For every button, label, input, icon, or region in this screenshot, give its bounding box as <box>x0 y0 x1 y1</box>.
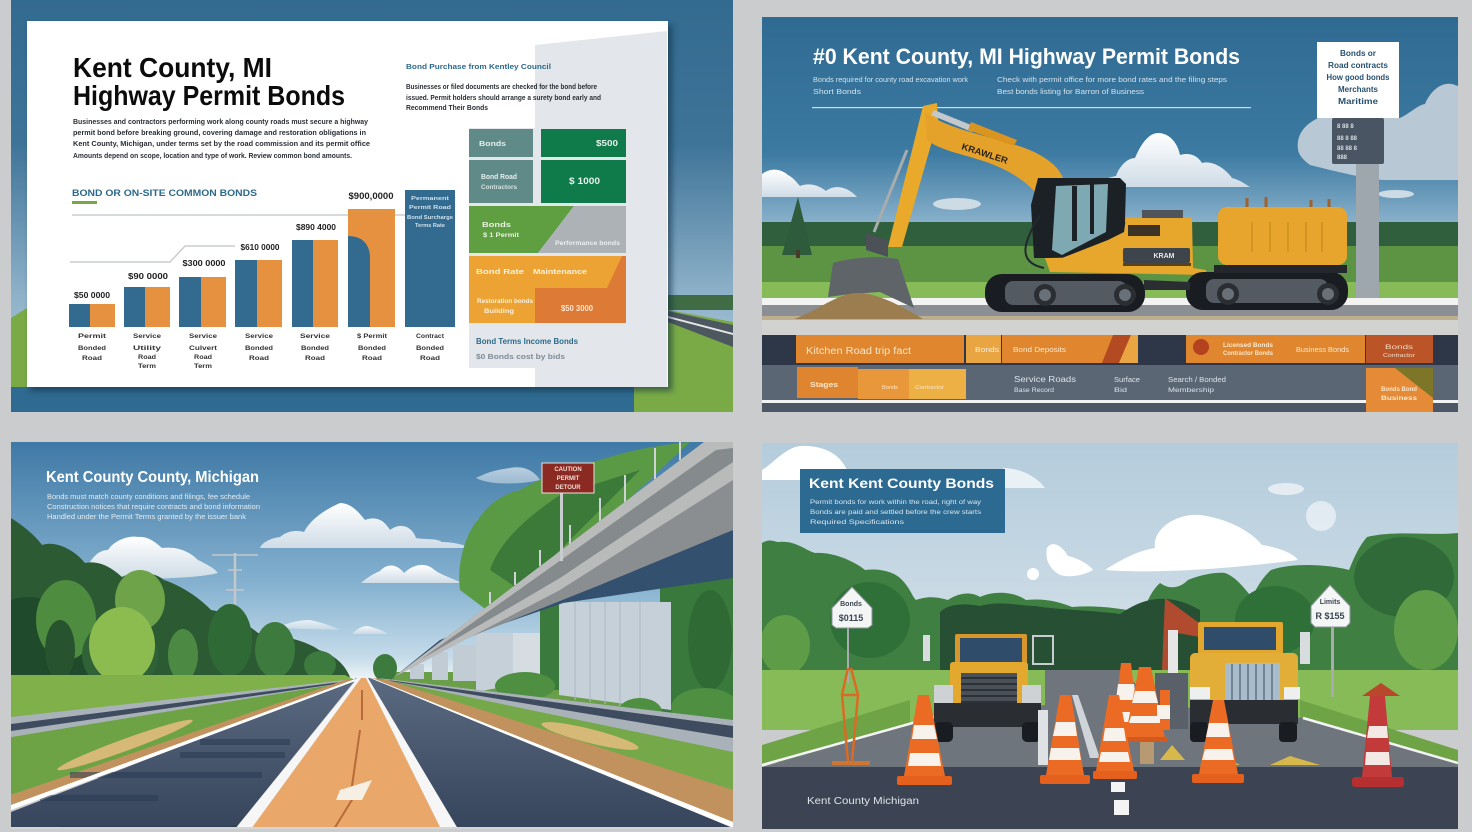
grass <box>762 670 1458 770</box>
bar 5 <box>292 222 338 327</box>
icon: pine tree <box>782 197 812 258</box>
bar category labels: Road <box>194 354 212 361</box>
bar category labels: Road <box>82 355 102 362</box>
sky <box>762 17 1458 227</box>
strip: bond badge bar: Contractor Bonds <box>1223 351 1274 357</box>
subtitle text: Best bonds listing for Barron of Business <box>997 87 1144 96</box>
side note heading and text: Businesses or filed documents are checked for the bond before <box>406 84 597 91</box>
dry grass patches <box>55 715 640 775</box>
strip: corner tile <box>1366 368 1433 412</box>
boom <box>932 120 1063 192</box>
white notice: Merchants <box>1338 85 1379 94</box>
intro text: Handled under the Permit Terms granted by the issuer bank <box>47 514 247 521</box>
tile: row 4: Building <box>484 308 514 315</box>
bushes at piers <box>495 672 739 728</box>
bar category labels: Bonded <box>416 345 444 352</box>
subtitle text <box>813 75 1227 96</box>
bar 2 <box>124 271 170 327</box>
strip: dark orange bar: Contractor <box>1383 353 1415 359</box>
road sign left <box>832 587 872 683</box>
bar category labels: Culvert <box>189 345 218 352</box>
road sign left: Bonds <box>840 601 862 608</box>
right truck <box>1155 598 1310 742</box>
strip: orange bar 3: Bond Deposits <box>1013 345 1066 354</box>
left lane <box>11 678 358 829</box>
strip: bond badge bar <box>1186 335 1365 363</box>
side note heading and text: Recommend Their Bonds <box>406 105 488 112</box>
bar category labels: $ Permit <box>357 333 388 340</box>
white report card <box>27 21 668 387</box>
side footer note: Bond Terms Income Bonds <box>476 337 579 346</box>
dark sign: 88 8 88 <box>1337 136 1358 142</box>
strip: lower orange tiles <box>797 367 966 399</box>
bar category labels: Contract <box>416 333 445 340</box>
strip: orange bar 3 <box>1002 335 1138 363</box>
panel: excavator slide <box>762 17 1458 412</box>
bar category labels: Term <box>138 363 156 370</box>
bar chart <box>69 190 455 370</box>
road sign: PERMIT <box>557 476 580 482</box>
bar category labels: Bonded <box>78 345 106 352</box>
bar category labels: Service <box>245 333 273 340</box>
pier medium <box>476 633 540 692</box>
tile: row 4 <box>469 256 626 323</box>
right road edge <box>11 827 733 829</box>
orange median <box>235 678 458 829</box>
tank trailer <box>1214 197 1347 273</box>
utility pole <box>212 553 258 672</box>
panel: road closure scene <box>760 443 1458 829</box>
strip: dark orange bar: Bonds <box>1385 344 1414 351</box>
strip: orange bar 2 <box>966 335 1001 363</box>
bar 7 with note <box>405 190 455 327</box>
road sign right: R $155 <box>1315 611 1345 621</box>
intro text <box>47 494 260 521</box>
soil pile <box>794 293 923 319</box>
strip: bond badge bar: Licensed Bonds <box>1223 343 1274 349</box>
bridge deck <box>394 442 733 677</box>
tile: row 2: Contractors <box>481 185 518 191</box>
strip: orange bar 1 <box>796 335 964 363</box>
title <box>74 58 344 111</box>
lane dashes <box>1111 782 1129 815</box>
subtitle text: Bonds required for county road excavation work <box>813 75 968 84</box>
bar 2: $90 0000 <box>128 271 168 281</box>
bar category labels: Service <box>133 333 161 340</box>
strip: bond badge bar: Business Bonds <box>1296 345 1349 354</box>
intro text: Bonds must match county conditions and filings, fee schedule <box>47 494 250 501</box>
white notice <box>1317 42 1399 118</box>
tile: row 1: Bonds <box>479 139 506 148</box>
side footer note <box>476 337 579 361</box>
pier small <box>410 645 476 681</box>
cone 4 <box>1192 700 1244 783</box>
hydraulic cylinder <box>874 150 907 232</box>
road sign <box>542 463 594 561</box>
chart heading: BOND OR ON-SITE COMMON BONDS <box>72 188 257 198</box>
left tree line <box>11 518 350 691</box>
right trees behind bridge <box>373 442 733 742</box>
strip: text columns: Base Record <box>1014 387 1054 394</box>
clouds <box>762 446 1336 580</box>
title box: Permit bonds for work within the road, right of way <box>810 499 982 506</box>
tile: row 1: $500 <box>596 139 619 148</box>
chart heading <box>72 188 257 204</box>
road sign: DETOUR <box>555 485 581 491</box>
bar category labels <box>78 333 445 370</box>
title box: Kent Kent County Bonds <box>809 475 994 491</box>
bar category labels: Service <box>300 333 330 340</box>
left truck <box>923 634 1053 742</box>
side note heading and text <box>406 62 601 112</box>
dark sign: 8 88 8 <box>1337 124 1354 130</box>
bar 7 with note: Bond Surcharge <box>407 215 453 221</box>
right crawler track <box>1186 272 1348 310</box>
bar category labels: Road <box>420 355 440 362</box>
strip: text columns <box>1014 375 1226 394</box>
road sign left: $0115 <box>839 613 863 623</box>
cone group: back cones <box>1112 663 1170 764</box>
overpass bridge <box>394 442 739 728</box>
bar 1: $50 0000 <box>74 290 110 300</box>
title box: Bonds are paid and settled before the crew starts <box>810 509 982 516</box>
tile: row 2: $ 1000 <box>569 176 600 186</box>
bar 3: $300 0000 <box>182 258 226 268</box>
girder underside <box>394 530 733 677</box>
white notice: Road contracts <box>1328 61 1389 70</box>
strip: text columns: Surface <box>1114 377 1140 384</box>
left crawler track <box>985 274 1145 312</box>
barrier post <box>1038 695 1100 765</box>
excavator: KRAWLER <box>960 141 1010 166</box>
sky <box>762 443 1458 683</box>
strip: lower orange tiles: Bonds <box>882 385 898 391</box>
distant ground <box>762 222 1458 320</box>
side note heading and text: Bond Purchase from Kentley Council <box>406 62 551 71</box>
pier large <box>559 602 671 710</box>
stick arm <box>888 103 938 247</box>
bar 6 <box>348 191 395 327</box>
bar 6: $900,0000 <box>348 191 394 201</box>
right lane <box>366 678 733 829</box>
bar category labels: Road <box>249 355 269 362</box>
cone 1 <box>897 695 952 785</box>
title: Kent County County, Michigan <box>46 469 259 486</box>
white notice: How good bonds <box>1326 73 1390 82</box>
title: Kent County, MI <box>73 52 272 83</box>
strip: text columns: Service Roads <box>1014 375 1076 384</box>
intro text block: Kent County, Michigan, under terms set by the road commission and its permit office <box>73 139 370 148</box>
bar category labels: Service <box>189 333 217 340</box>
strip: text columns: Membership <box>1168 387 1214 394</box>
panel: bond chart slide <box>11 0 733 412</box>
bar category labels: Road <box>305 355 325 362</box>
excavator <box>828 103 1348 312</box>
sign post with notice <box>1317 42 1399 298</box>
strip: text columns: Bid <box>1114 387 1128 394</box>
tile: row 3 <box>469 206 626 253</box>
engine body <box>1045 218 1206 275</box>
tile: row 2 <box>469 160 626 203</box>
sky <box>11 442 733 682</box>
strip: orange bar 1: Kitchen Road trip fact <box>806 346 911 357</box>
right guardrail <box>378 678 733 752</box>
intro text block: permit bond before breaking ground, covering damage and restoration obligations in <box>73 128 366 137</box>
side footer note: $0 Bonds cost by bids <box>476 352 565 361</box>
bar category labels: Bonded <box>245 345 273 352</box>
excavator: KRAM <box>1154 253 1175 260</box>
red striped cone <box>1352 683 1404 787</box>
footer caption: Kent County Michigan <box>807 796 919 807</box>
cone 3 <box>1093 695 1137 779</box>
bucket <box>828 257 914 308</box>
bar category labels: Permit <box>78 333 107 340</box>
strip: lower orange tiles: Stages <box>810 380 838 389</box>
strip: corner tile: Bonds Bond <box>1381 387 1417 393</box>
bar 3 <box>179 258 226 327</box>
right grass <box>378 678 733 795</box>
bar category labels: Road <box>362 355 382 362</box>
tile: row 4: Restoration bonds <box>477 298 533 305</box>
tile: row 1 <box>469 129 626 157</box>
tile: row 3: Performance bonds <box>555 241 621 247</box>
road sign: CAUTION <box>554 467 582 473</box>
clouds <box>762 84 1458 210</box>
cone 2 <box>1040 695 1090 784</box>
road <box>762 670 1458 829</box>
clouds <box>85 467 540 634</box>
bar category labels: Bonded <box>301 345 329 352</box>
bar category labels: Road <box>138 354 156 361</box>
dark sign: 888 <box>1337 155 1348 161</box>
bar category labels: Bonded <box>358 345 386 352</box>
strip: corner tile: Business <box>1381 396 1418 402</box>
bar 4 <box>235 242 282 327</box>
tile: row 4: $50 3000 <box>561 304 594 313</box>
panel: highway perspective scene <box>11 442 739 829</box>
tile: row 2: Bond Road <box>481 172 517 181</box>
tile: row 4: Bond Rate <box>476 267 524 276</box>
tile: row 4: Maintenance <box>533 267 587 276</box>
info strip bands <box>762 335 1458 412</box>
title box: Required Specifications <box>810 519 905 526</box>
left grass <box>11 675 355 720</box>
cab <box>1031 178 1126 258</box>
dark sign: 88 88 8 <box>1337 146 1358 152</box>
bar 1 <box>69 290 115 327</box>
bar 5: $890 4000 <box>296 222 336 232</box>
bar 7 with note: Permit Road <box>409 205 451 211</box>
light green foreground tree <box>89 607 155 683</box>
strip: text columns: Search / Bonded <box>1168 375 1226 384</box>
slide background scene <box>11 0 733 412</box>
strip: dark orange bar <box>1366 335 1433 363</box>
white notice: Maritime <box>1338 97 1379 106</box>
intro text block <box>73 117 370 160</box>
right shoulder <box>372 678 733 822</box>
orange sign stand <box>832 668 870 763</box>
bar 7 with note: Terms Rate <box>415 223 445 229</box>
bar 4: $610 0000 <box>240 242 280 252</box>
rail posts <box>490 442 680 604</box>
title box <box>800 469 1005 533</box>
dark sign <box>1332 118 1384 164</box>
white notice: Bonds or <box>1340 49 1376 58</box>
tile: row 3: Bonds <box>482 222 511 229</box>
strip: orange bar 2: Bonds <box>975 345 999 354</box>
bar category labels: Term <box>194 363 212 370</box>
road sign right: Limits <box>1320 599 1340 606</box>
tree line <box>760 533 1458 675</box>
title: #0 Kent County, MI Highway Permit Bonds <box>813 44 1240 69</box>
road sign right <box>1311 585 1350 697</box>
bar 7 with note: Permanent <box>411 196 449 202</box>
subtitle text: Short Bonds <box>813 87 861 96</box>
subtitle text: Check with permit office for more bond rates and the filing steps <box>997 75 1227 84</box>
title: Highway Permit Bonds <box>73 80 345 111</box>
tile grid: bond amounts <box>469 129 626 323</box>
left guardrail <box>11 680 350 737</box>
tile: row 3: $ 1 Permit <box>483 232 520 239</box>
strip: lower orange tiles: Contractor <box>915 385 944 391</box>
intro text block: Businesses and contractors performing work along county roads must secure a highway <box>73 117 369 126</box>
side note heading and text: issued. Permit holders should arrange a surety bond early and <box>406 95 601 102</box>
left shoulder <box>11 680 358 807</box>
bar category labels: Utility <box>133 345 162 352</box>
intro text: Construction notices that require contracts and bond information <box>47 504 260 511</box>
intro text block: Amounts depend on scope, location and type of work. Review common bond amounts. <box>73 151 352 160</box>
